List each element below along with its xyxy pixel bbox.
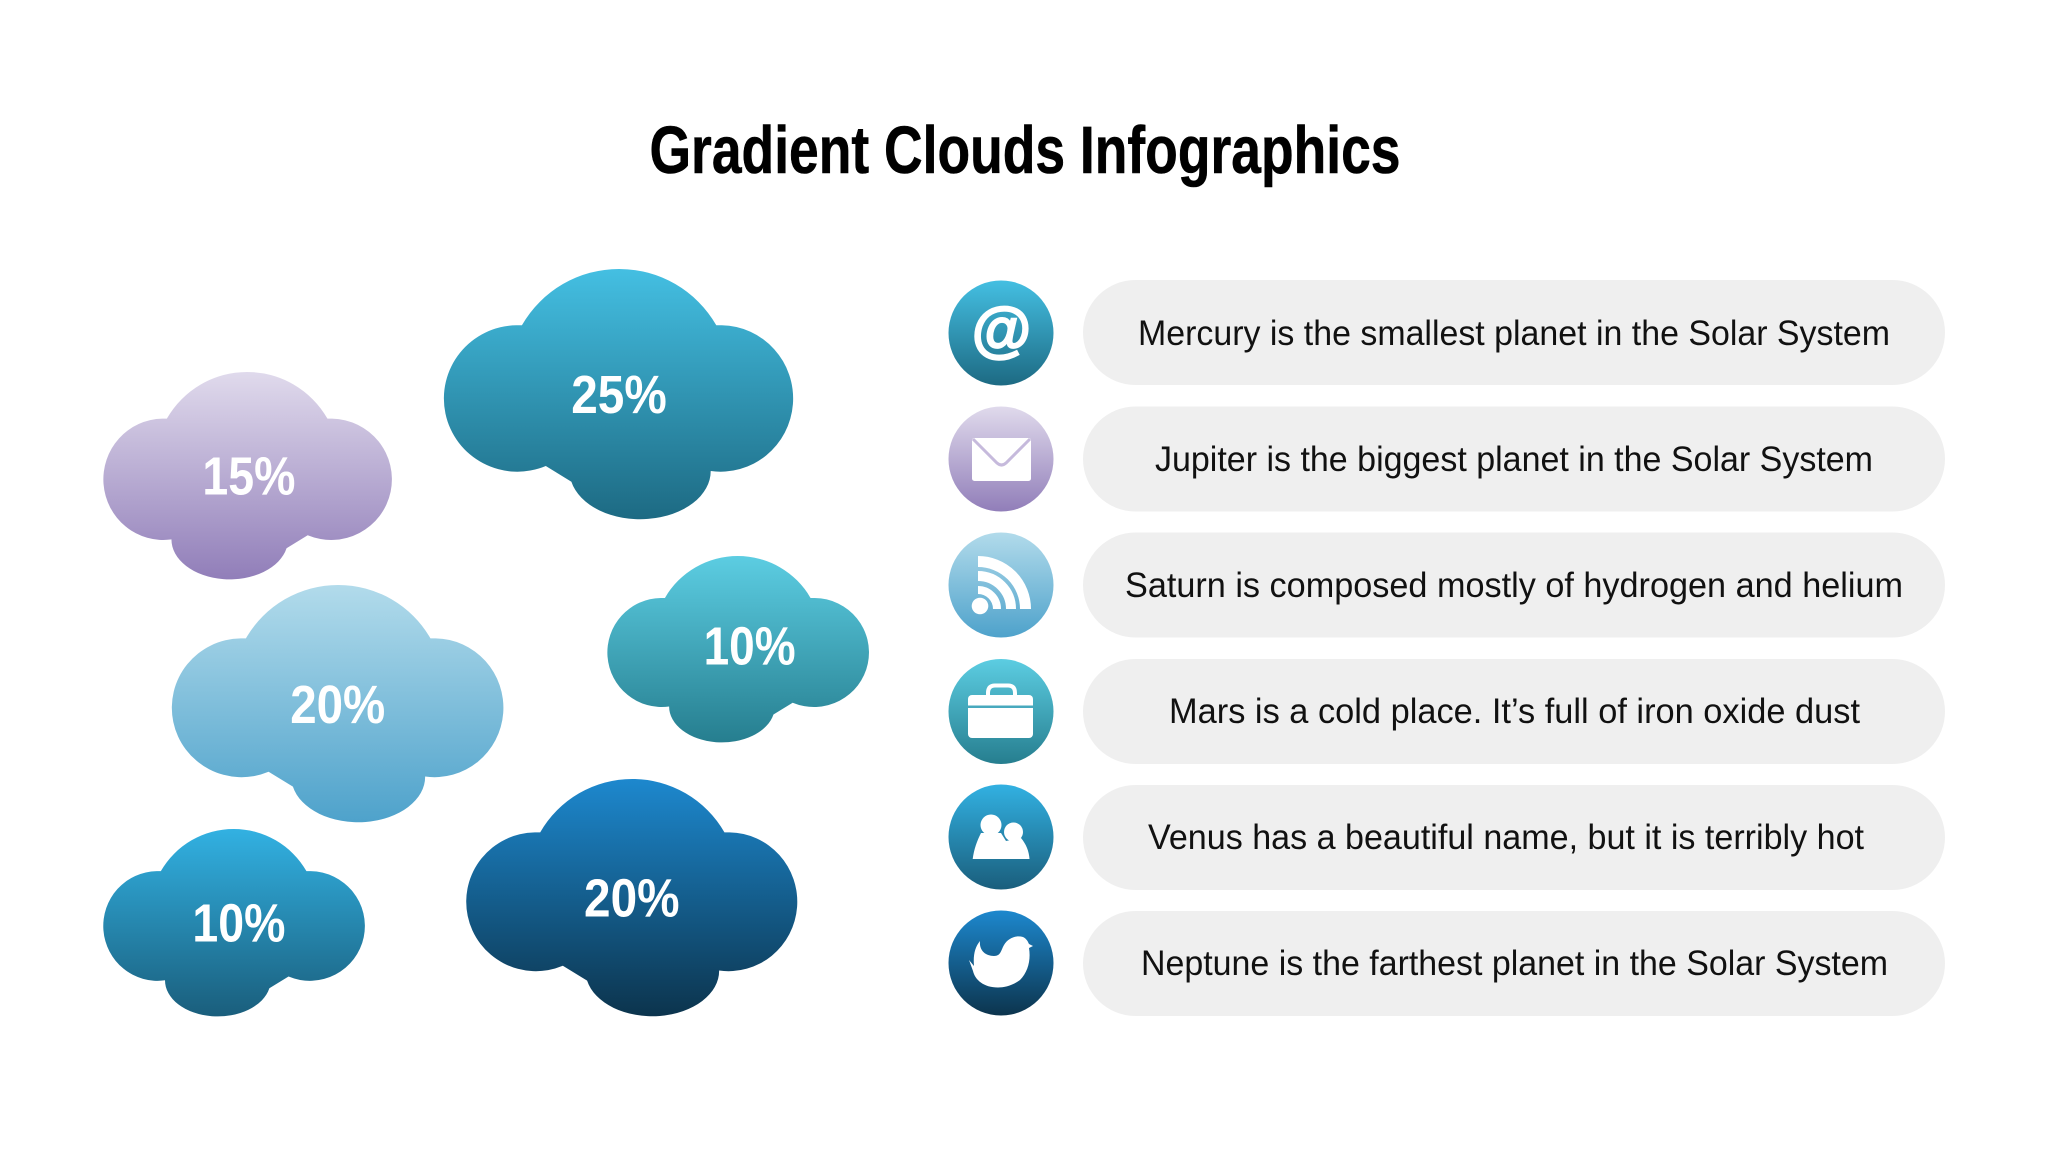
pill: Jupiter [1083, 406, 1945, 512]
pill: Mars: Mars is a cold place. It’s full of iron oxide dust [1169, 692, 1860, 731]
title: Gradient Clouds Infographics [650, 113, 1400, 188]
cloud: 10% teal: 10% [704, 616, 796, 676]
pill: Venus [1083, 785, 1945, 890]
icon: at sign: @ [971, 296, 1030, 364]
pill: Saturn: Saturn is composed mostly of hydrogen and helium [1125, 566, 1903, 605]
icon: bird [948, 910, 1054, 1016]
pill: Neptune [1083, 911, 1945, 1016]
pill: Mars [1083, 659, 1945, 764]
cloud: 20% dark blue [466, 779, 797, 1016]
cloud: 15%: 15% [202, 446, 295, 506]
cloud: 10% blue [103, 829, 365, 1016]
pill: Venus: Venus has a beautiful name, but it is terribly hot [1148, 818, 1864, 857]
cloud: 10% blue: 10% [192, 894, 285, 954]
cloud: 20% dark blue: 20% [584, 868, 680, 928]
icon: at sign [948, 280, 1054, 386]
cloud: 25%: 25% [571, 365, 667, 425]
icon: rss [948, 532, 1054, 638]
cloud: 10% teal [607, 556, 869, 742]
pill: Mercury [1083, 280, 1945, 385]
cloud: 20% light blue [172, 585, 503, 822]
icon: briefcase [948, 659, 1054, 764]
pill: Neptune: Neptune is the farthest planet in the Solar System [1141, 944, 1888, 983]
cloud: 20% light blue: 20% [290, 675, 385, 735]
icon: people [948, 784, 1054, 890]
cloud: 25% [444, 269, 793, 519]
pill: Saturn [1083, 532, 1945, 638]
icon: envelope [948, 406, 1054, 512]
cloud: 15% [103, 372, 392, 579]
pill: Mercury: Mercury is the smallest planet in the Solar System [1138, 314, 1890, 353]
pill: Jupiter: Jupiter is the biggest planet in the Solar System [1155, 440, 1873, 479]
